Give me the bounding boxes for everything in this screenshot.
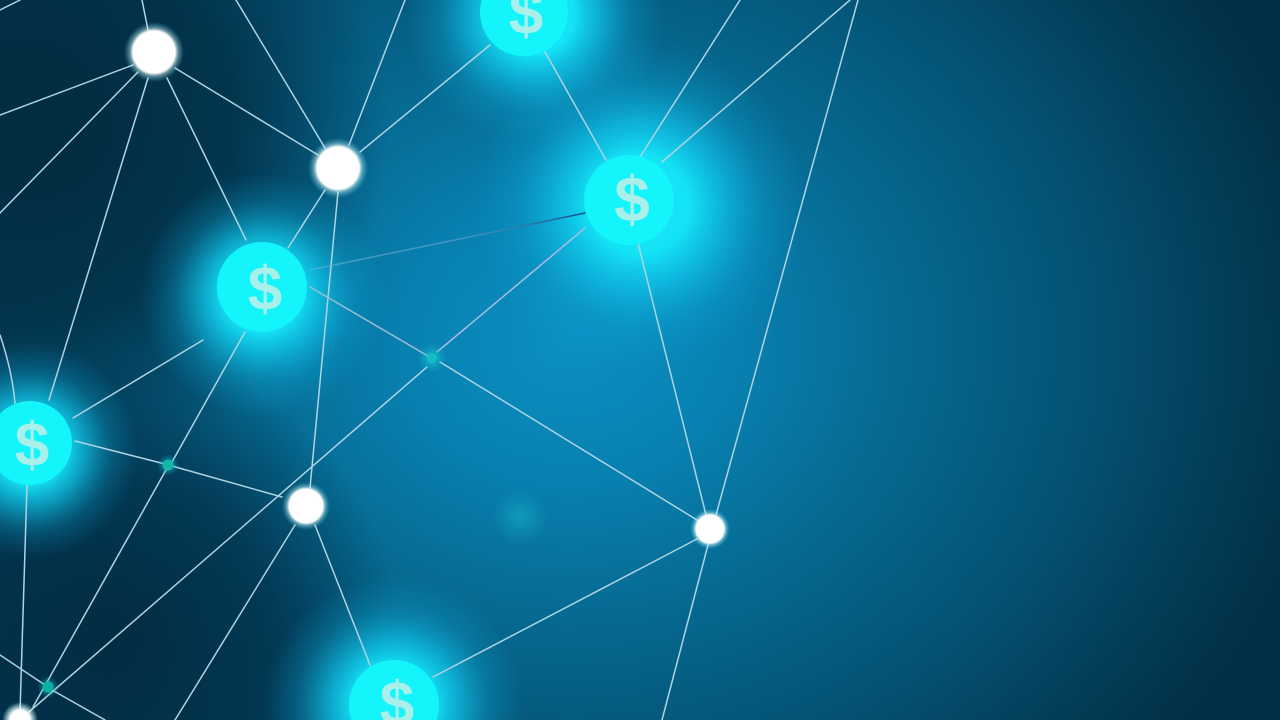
small teal nodes bbox=[37, 343, 447, 698]
dollar node: center right bbox=[584, 155, 674, 245]
dollar node: center right: $ bbox=[614, 163, 650, 235]
dollar node: center left bbox=[217, 242, 307, 332]
left dark vignette bbox=[0, 0, 400, 720]
dollar node: center left: $ bbox=[248, 255, 282, 324]
dollar node: left bbox=[0, 401, 72, 485]
dollar node: left: $ bbox=[15, 411, 49, 480]
dollar node: bottom bbox=[349, 660, 439, 720]
connecting lines bbox=[0, 0, 858, 720]
white nodes bbox=[2, 22, 730, 720]
dollar node: top bbox=[480, 0, 568, 56]
glow halos bbox=[0, 0, 805, 720]
